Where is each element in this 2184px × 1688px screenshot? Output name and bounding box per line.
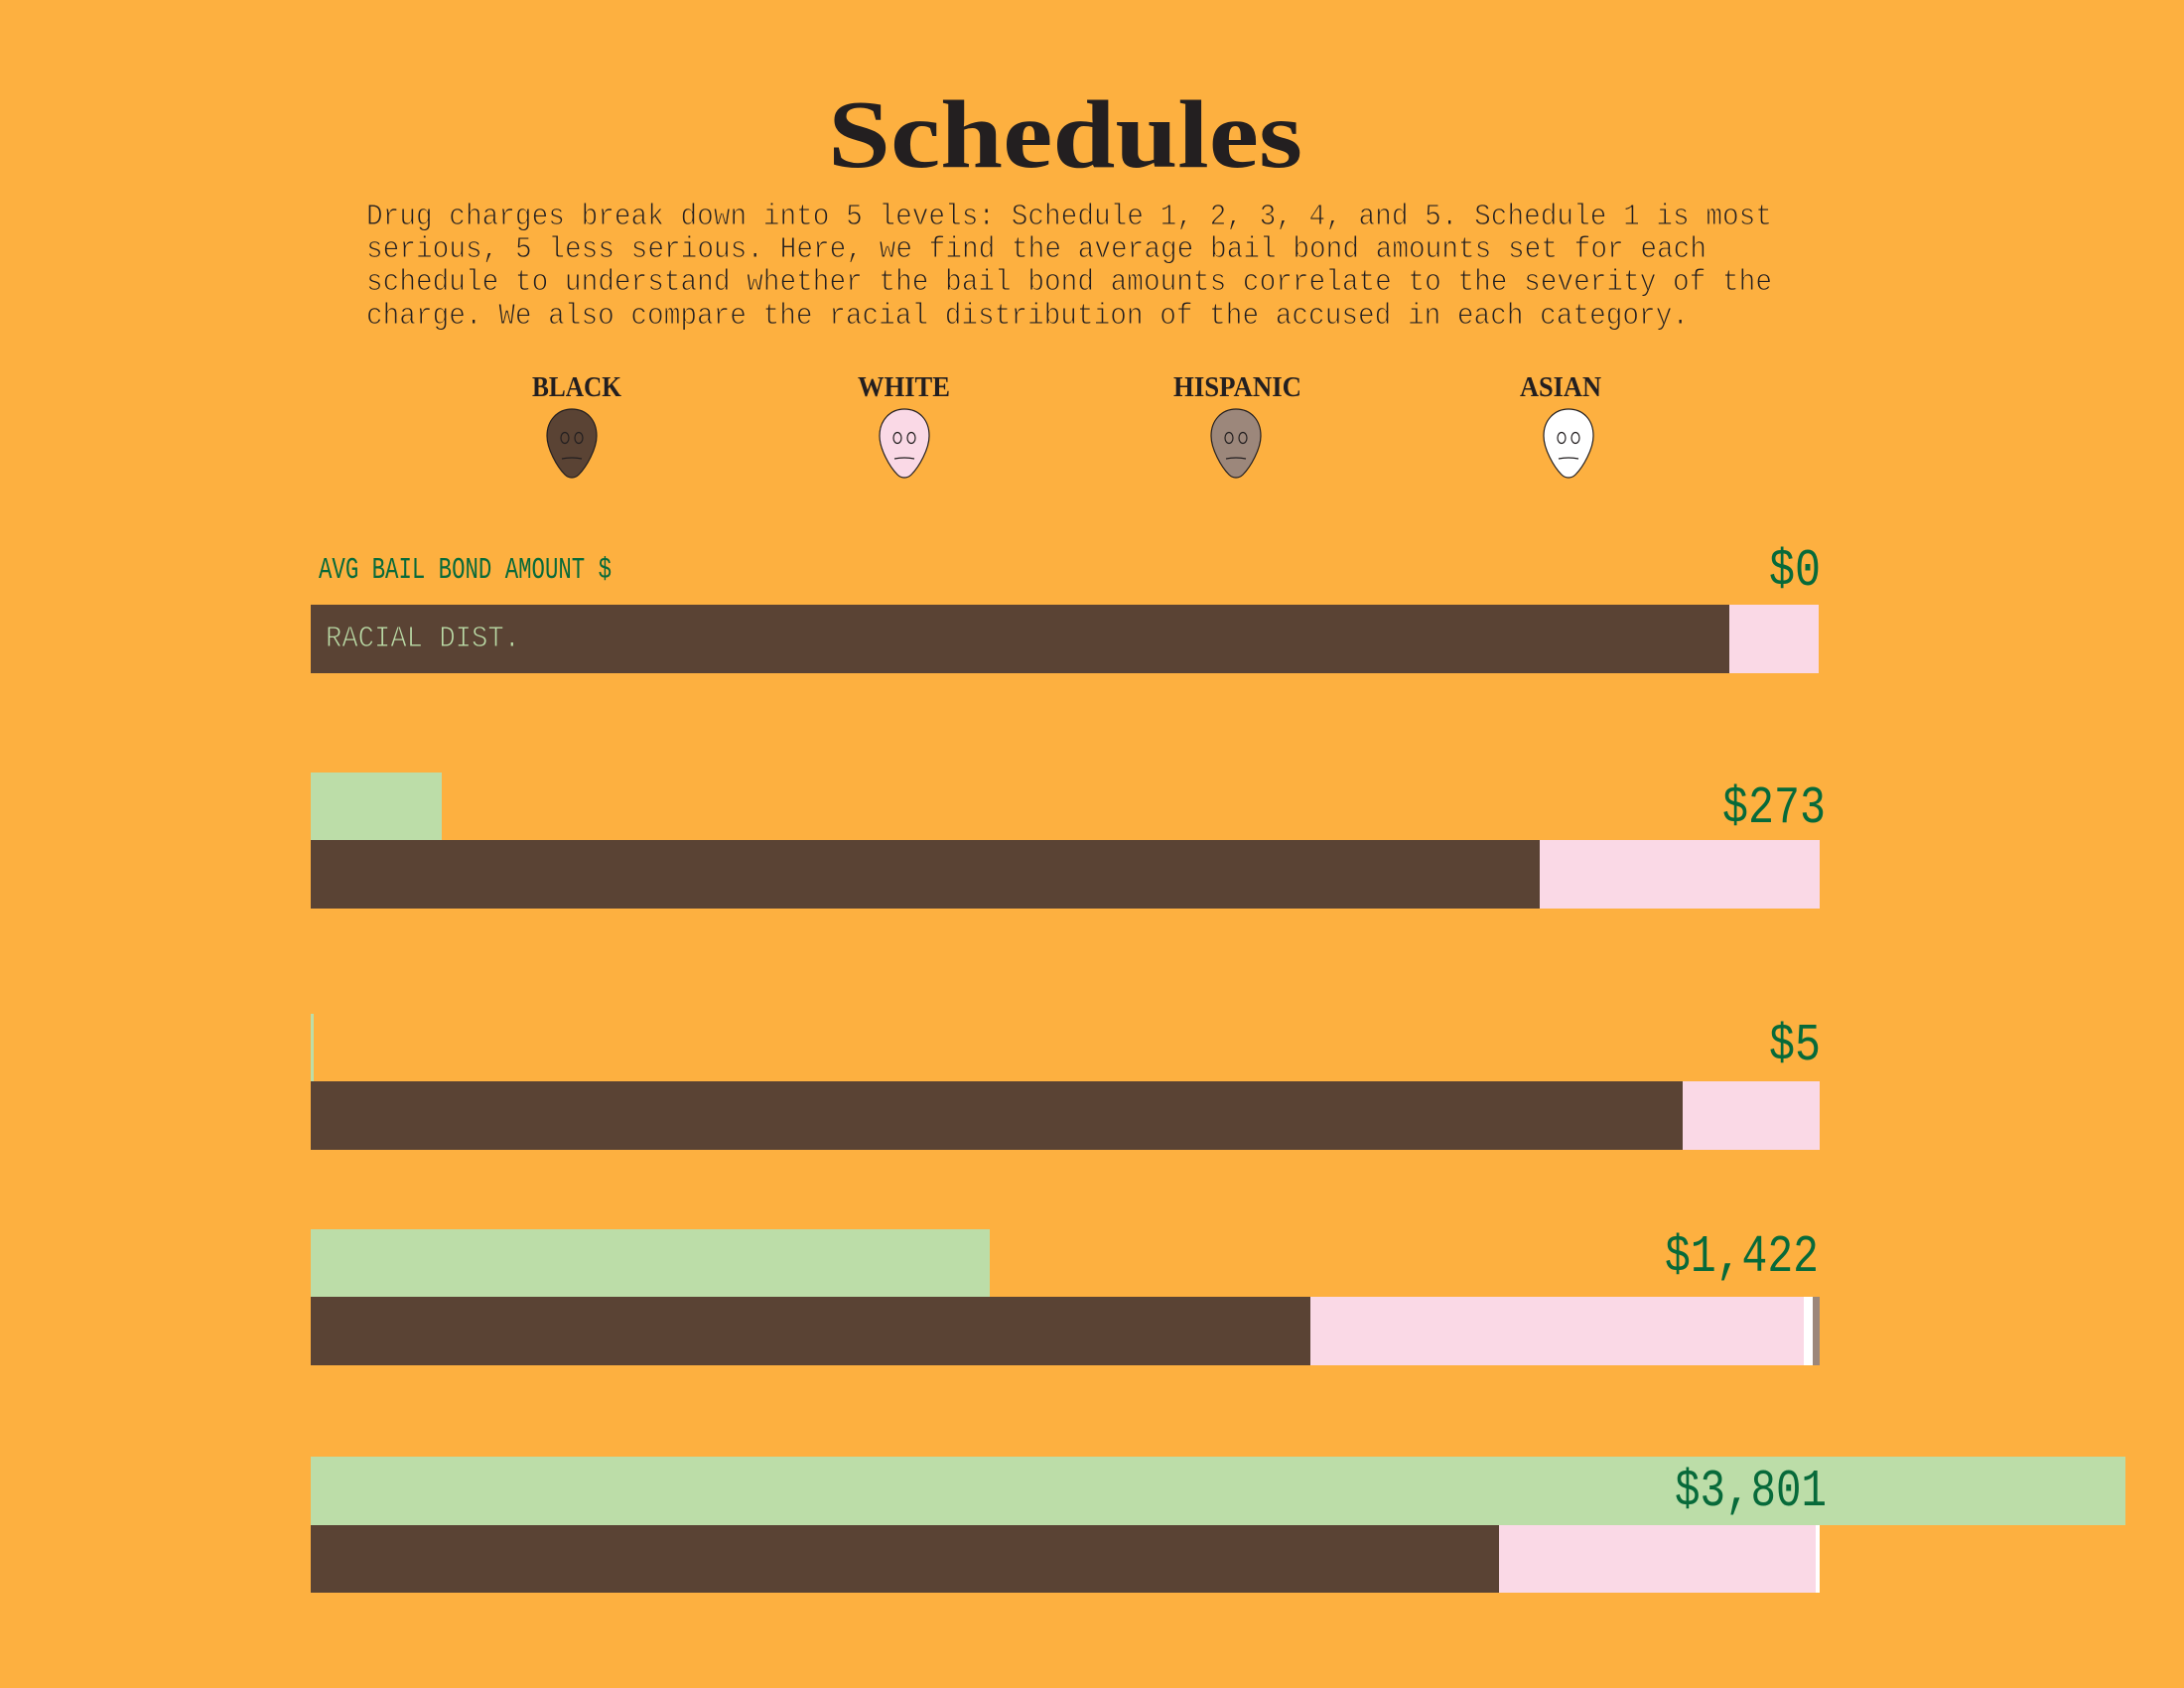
value: $5: $5: [1769, 1016, 1821, 1075]
legend: white: WHITE: [858, 372, 950, 403]
stacked bar: racial distribution schedule 2: [311, 840, 1820, 909]
title: Schedules: [828, 81, 1302, 189]
row: schedule 1: [311, 541, 1821, 673]
bail bar: $1,422: [311, 1229, 990, 1297]
legend: asian: ASIAN: [1520, 372, 1601, 403]
intro text block: charge. We also compare the racial distribution of the accused in each category.: [366, 299, 1689, 334]
row: schedule 4: [311, 1227, 1820, 1365]
intro text block: [366, 200, 1772, 334]
icon: hispanic face: [1211, 409, 1261, 478]
value: $3,801: $3,801: [1675, 1462, 1827, 1521]
value: $1,422: $1,422: [1665, 1227, 1819, 1287]
bail bar: $3,801: [311, 1457, 2125, 1525]
bar label: racial dist.: RACIAL DIST.: [326, 622, 520, 656]
legend: hispanic: HISPANIC: [1173, 372, 1301, 403]
axis label: avg bail bond amount: AVG BAIL BOND AMOUNT $: [319, 553, 612, 588]
stacked bar: racial distribution schedule 3: [311, 1081, 1820, 1150]
legend: black: [532, 372, 621, 478]
legend: black: BLACK: [532, 372, 621, 403]
row: schedule 2: [311, 773, 1826, 909]
stacked bar: racial distribution schedule 5: [311, 1525, 1820, 1593]
bail bar: $5: [311, 1014, 314, 1081]
intro text block: schedule to understand whether the bail bond amounts correlate to the severity of the: [366, 265, 1772, 300]
stacked bar: racial distribution schedule 1: [311, 605, 1819, 673]
value: $0: $0: [1769, 541, 1821, 601]
value: $273: $273: [1722, 778, 1826, 838]
stacked bar: racial distribution schedule 4: [311, 1297, 1820, 1365]
legend: asian: [1520, 372, 1601, 478]
row: schedule 3: [311, 1014, 1821, 1150]
intro text block: Drug charges break down into 5 levels: Schedule 1, 2, 3, 4, and 5. Schedule 1 is most: [366, 200, 1772, 234]
icon: asian face: [1544, 409, 1593, 478]
bail bar: $273: [311, 773, 442, 840]
icon: white face: [880, 409, 929, 478]
icon: black face: [547, 409, 597, 478]
row: schedule 5: [311, 1457, 2125, 1593]
intro text block: serious, 5 less serious. Here, we find the average bail bond amounts set for each: [366, 232, 1706, 267]
legend: hispanic: [1173, 372, 1301, 478]
legend: white: [858, 372, 950, 478]
